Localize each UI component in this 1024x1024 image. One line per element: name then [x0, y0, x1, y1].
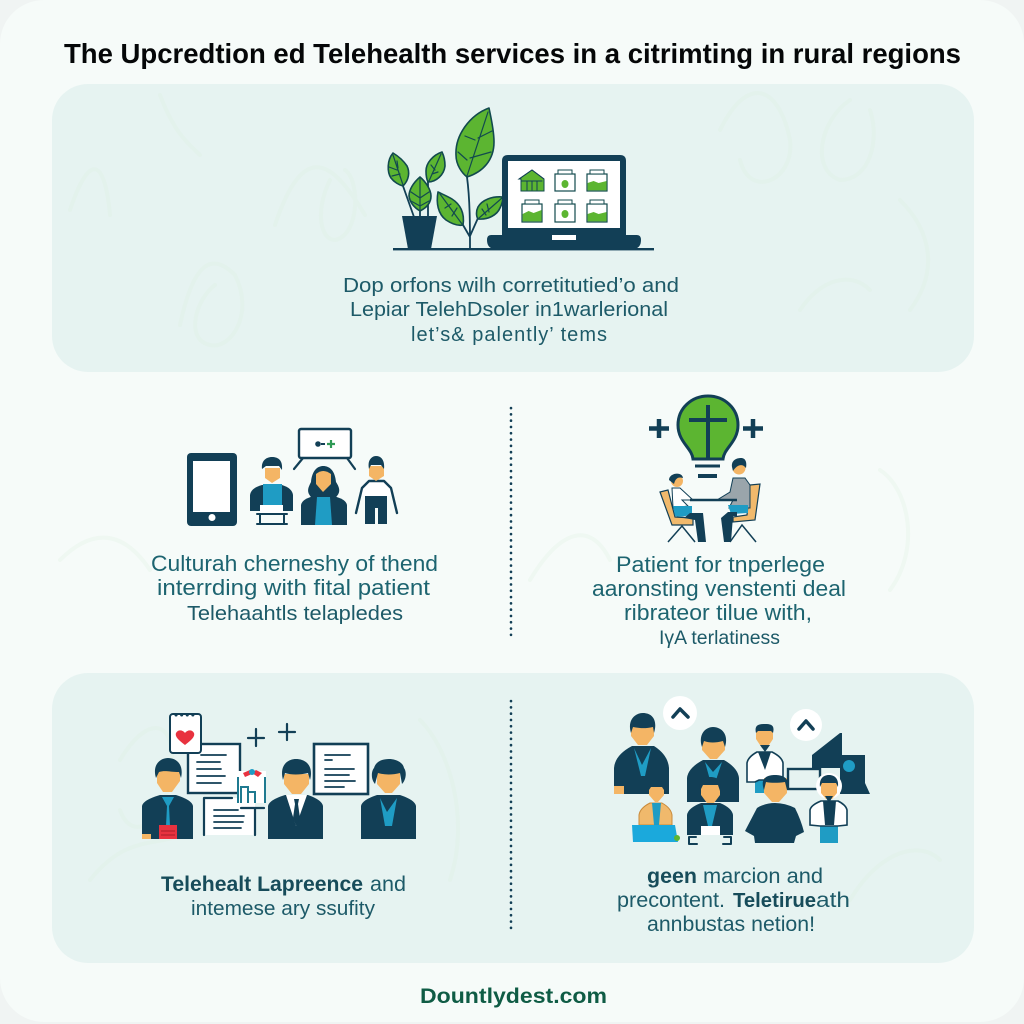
icon: front person with card — [687, 777, 733, 844]
icon: monitor bubble — [294, 429, 355, 469]
ground line — [393, 248, 654, 250]
icon: badge right — [790, 709, 822, 741]
text: middle right: IγA terlatiness — [659, 628, 780, 649]
icon: badge left — [663, 696, 697, 730]
icon: back person 3 white coat — [747, 724, 783, 793]
icon: front person in sweater — [745, 775, 804, 843]
icon: plus right — [743, 419, 763, 438]
icon: laptop — [487, 155, 641, 249]
icon: person 3 curly hair — [361, 759, 416, 839]
text: bottom left: and — [370, 873, 406, 896]
text: bottom right — [617, 865, 850, 936]
icon: person at desk — [250, 457, 293, 524]
icon: plus pair — [248, 724, 295, 746]
icon: screen tile calendar 1 — [555, 170, 575, 191]
icon: screen tile landscape 3 — [587, 200, 607, 222]
icon: plus left — [649, 419, 669, 438]
text: middle left: Telehaahtls telapledes — [187, 603, 403, 625]
text: bottom right: marcion and — [703, 865, 823, 888]
text: middle right — [592, 552, 846, 649]
footer url: Dountlydest.com — [420, 984, 607, 1008]
icon: screen tile calendar 2 — [555, 200, 575, 222]
text: bottom left: Telehealt Lapreence — [161, 873, 363, 896]
icon: document 3 — [314, 744, 368, 794]
illustration: team group — [614, 696, 870, 844]
panel: bottom background — [52, 673, 974, 963]
text: middle left: interrding with fital patient — [157, 575, 430, 600]
icon: back person 1 — [614, 713, 669, 794]
icon: screen tile landscape 2 — [522, 200, 542, 222]
divider: middle — [510, 408, 512, 638]
icon: front person orange coat — [632, 780, 680, 842]
text: middle right: ribrateor tilue with, — [624, 600, 812, 625]
watermark squiggles — [60, 93, 940, 900]
text: middle right: Patient for tnperlege — [616, 552, 825, 577]
text: bottom right: annbustas netion! — [647, 913, 815, 936]
illustration: plants and laptop — [388, 108, 654, 250]
text: bottom right: precontent. — [617, 889, 725, 912]
text: bottom right: ath — [816, 889, 850, 912]
text: bottom right: Teletirue — [733, 890, 816, 912]
text: bottom left: intemese ary ssufity — [191, 898, 375, 920]
illustration: lightbulb and consultation — [649, 396, 763, 542]
text: top panel — [343, 275, 679, 346]
text: top panel: Lepiar TelehDsoler in1warlerional — [350, 299, 668, 321]
icon: screen tile landscape 1 — [587, 170, 607, 191]
icon: lightbulb — [678, 396, 738, 476]
icon: man in white shirt — [356, 456, 397, 524]
text: middle left — [151, 551, 438, 625]
panel: top background — [52, 84, 974, 372]
text: top panel: Dop orfons wilh corretitutied’o and — [343, 275, 679, 297]
text: top panel: let’s& palently’ tems — [411, 324, 607, 346]
icon: document 2 — [204, 798, 264, 835]
icon: person 1 with red folder — [142, 758, 193, 839]
icon: person 2 in suit — [268, 759, 323, 839]
icon: device — [788, 733, 870, 794]
divider: bottom — [510, 701, 512, 932]
icon: chart card — [237, 769, 266, 803]
icon: table — [690, 499, 737, 501]
title: The Upcredtion ed Telehealth services in a citrimting in rural regions — [64, 38, 961, 69]
icon: back person 2 — [687, 727, 739, 802]
icon: right seated person — [717, 458, 760, 542]
icon: potted plant — [388, 152, 445, 249]
text: middle right: aaronsting venstenti deal — [592, 576, 846, 601]
icon: left seated person — [660, 474, 706, 542]
icon: screen tile house — [519, 170, 544, 191]
icon: tall plant — [437, 108, 503, 249]
illustration: tablet and group — [187, 429, 397, 526]
icon: tablet — [187, 453, 237, 526]
icon: calendar with heart — [170, 714, 201, 753]
icon: document 1 — [188, 744, 240, 793]
illustration: three staff with documents — [142, 714, 416, 839]
text: middle left: Culturah cherneshy of thend — [151, 551, 438, 576]
text: bottom right: geen — [647, 865, 697, 888]
text: bottom left — [161, 873, 406, 920]
icon: front person white coat — [810, 773, 847, 843]
icon: woman — [301, 466, 347, 525]
